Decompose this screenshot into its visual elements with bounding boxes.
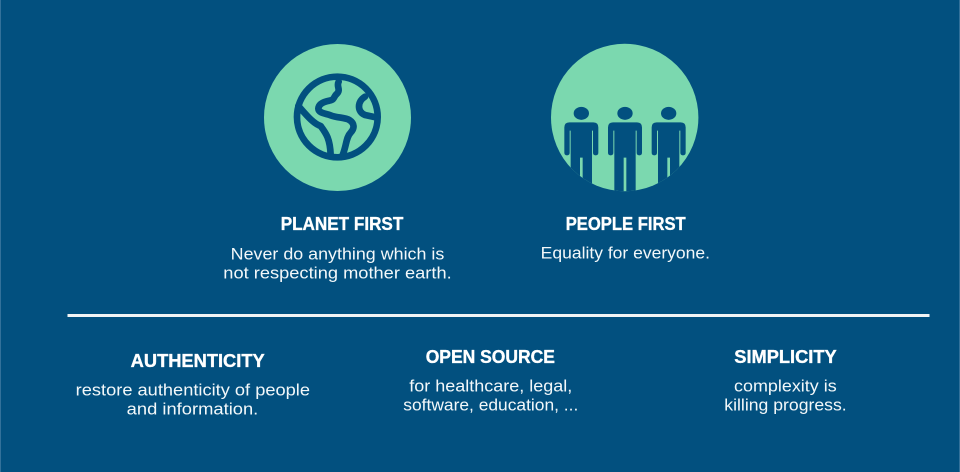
text: authenticity description: [76, 382, 310, 419]
text: authenticity description: restore authenticity of people: [76, 382, 310, 400]
text: people first description: Equality for everyone.: [541, 245, 710, 263]
text: planet first description: [223, 246, 452, 282]
text: simplicity description: complexity is: [734, 378, 837, 396]
text: planet first description: not respecting mother earth.: [223, 264, 452, 282]
heading: simplicity: SIMPLICITY: [734, 347, 837, 367]
panel: open source: [403, 347, 578, 415]
text: authenticity description: and information.: [127, 401, 258, 419]
heading: authenticity: AUTHENTICITY: [131, 351, 265, 371]
text: planet first description: Never do anything which is: [231, 246, 444, 264]
panel: people first: [541, 44, 710, 263]
text: simplicity description: killing progress.: [724, 397, 847, 415]
panel: authenticity: [76, 351, 310, 419]
text: open source description: for healthcare, legal,: [409, 378, 572, 396]
heading: people first: PEOPLE FIRST: [566, 214, 686, 234]
text: simplicity description: [724, 378, 847, 415]
text: open source description: [403, 378, 578, 415]
icon: globe in green circle: [264, 44, 411, 191]
panel: simplicity: [724, 347, 847, 415]
text: open source description: software, education, ...: [403, 397, 578, 415]
heading: open source: OPEN SOURCE: [426, 347, 555, 367]
heading: planet first: PLANET FIRST: [281, 214, 403, 234]
panel: planet first: [223, 44, 452, 282]
icon: three people in green circle: [551, 44, 698, 197]
